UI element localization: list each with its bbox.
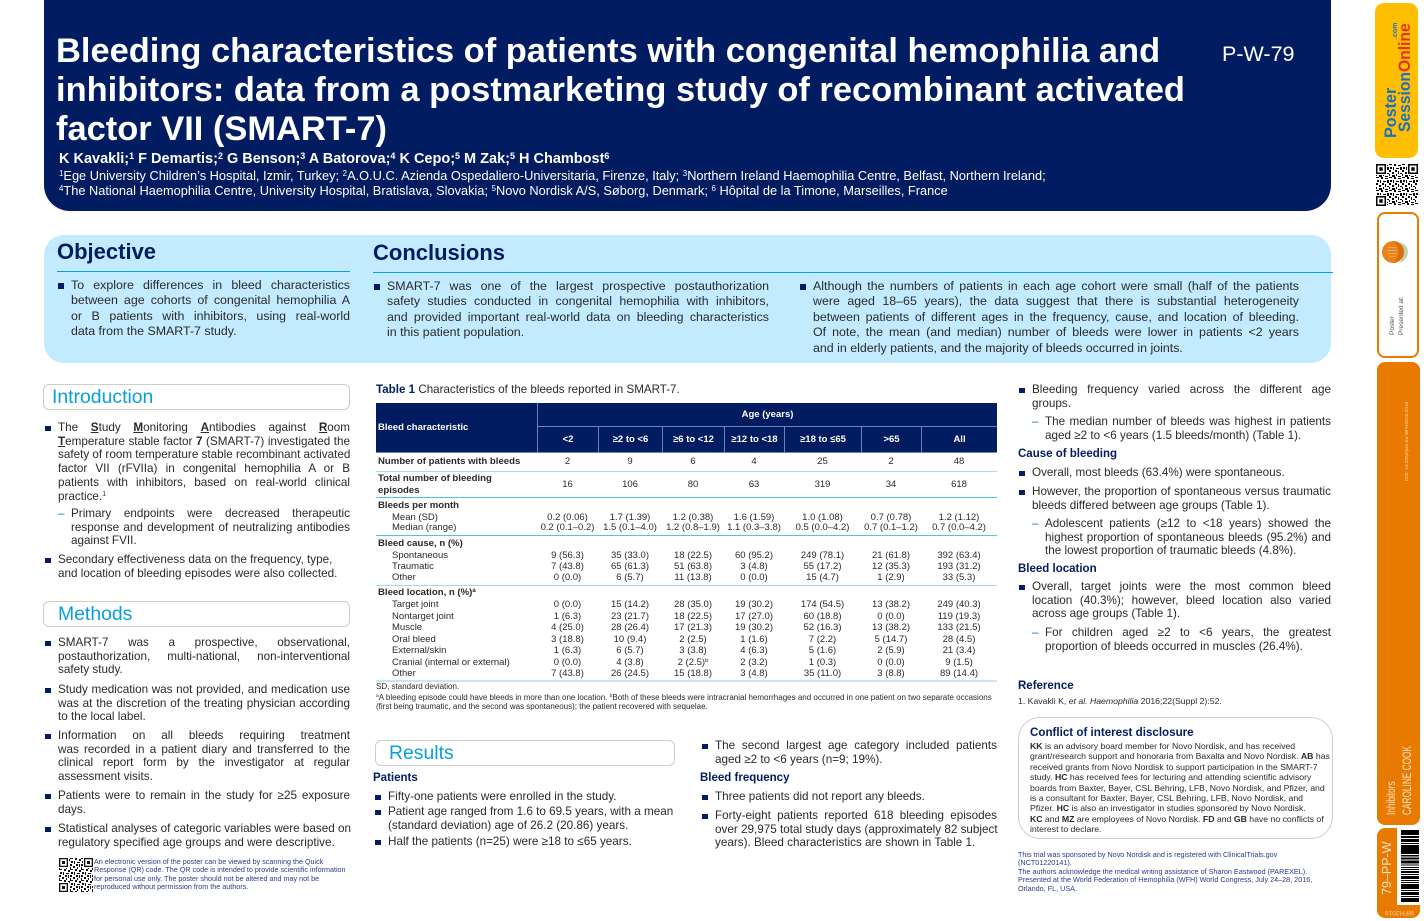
right column: median sub-bullet: aged ≥2 to <6 years (1.5 bleeds/month) (Table 1). — [1045, 429, 1301, 442]
table: bleed characteristics: 28 (4.5) — [943, 634, 975, 644]
table: bleed characteristics: 18 (22.5) — [674, 550, 712, 560]
table: bleed characteristics: Number of patients with bleeds — [378, 456, 520, 467]
table: bleed characteristics: 0.7 (0.78) — [871, 512, 911, 522]
table: bleed characteristics: Cranial (internal or external) — [392, 657, 510, 668]
conclusion text 2: were aged 18–65 years), the data suggest that there is substantial heterogeneity — [813, 294, 1299, 308]
QR code note: for personal use only. The poster should not be altered and may not be — [94, 874, 319, 883]
introduction sub-bullet — [71, 507, 350, 548]
table: bleed characteristics: 0.2 (0.1–0.2) — [541, 522, 594, 533]
table: bleed characteristics: 1.2 (0.38) — [673, 512, 713, 522]
affiliations: 1Ege University Children’s Hospital, Izmir, Turkey; 2A.O.U.C. Azienda Ospedaliero-Universitaria, Firenze, Italy; 3Northern Ireland Haemophilia Centre, Belfast, Northern Ireland; — [59, 168, 1046, 183]
sidebar: poster session online logo — [1375, 3, 1418, 158]
table: bleed characteristics: ≥6 to <12 — [673, 434, 714, 444]
table: bleed characteristics: 319 — [815, 478, 830, 490]
conclusion text 2: Of note, the mean (and median) number of bleeds were lower in patients <2 years — [813, 325, 1299, 339]
conflict text: Pfizer. HC is also an investigator in studies sponsored by Novo Nordisk. — [1030, 803, 1306, 813]
heading: methods — [43, 601, 350, 627]
heading: methods: Methods — [58, 603, 132, 625]
table: bleed characteristics: 2 (2.5) — [679, 634, 707, 644]
acknowledgements — [1018, 850, 1312, 892]
table: bleed characteristics: 1.2 (1.12) — [939, 512, 979, 522]
conclusion text 2: Although the numbers of patients in each age cohort were small (half of the patients — [813, 279, 1299, 293]
introduction bullet 1: The Study Monitoring Antibodies against Room — [58, 421, 350, 434]
results bullet: forty-eight patients — [715, 809, 997, 850]
methods bullet 4: days. — [58, 803, 86, 816]
results bullet: second largest category: aged ≥2 to <6 years (n=9; 19%). — [715, 753, 883, 766]
table: bleed characteristics: 3 (18.8) — [551, 634, 584, 644]
conclusion text 1: and provided important real-world data on bleeding characteristics — [387, 310, 769, 324]
table: bleed characteristics: ≥2 to <6 — [613, 434, 648, 444]
table: bleed characteristics: All — [953, 434, 966, 444]
location bullet: across age groups (Table 1). — [1032, 607, 1180, 620]
table: bleed characteristics: 2 — [565, 456, 570, 467]
table: bleed characteristics: Target joint — [392, 599, 438, 610]
acknowledgements: (NCT01220141). — [1018, 858, 1072, 867]
table: bleed characteristics: 15 (14.2) — [611, 599, 649, 610]
table: bleed characteristics: 174 (54.5) — [801, 599, 844, 610]
conclusion text 1 — [387, 279, 769, 341]
objective text — [71, 278, 350, 340]
table: bleed characteristics: Nontarget joint — [392, 610, 454, 622]
heading: introduction: Introduction — [52, 386, 153, 408]
title: inhibitors: data from a postmarketing study of recombinant activated — [56, 71, 1185, 109]
methods bullet 5: Statistical analyses of categoric variables were based on — [58, 822, 351, 835]
table: bleed characteristics: Muscle — [392, 622, 422, 633]
sidebar: poster code and barcode — [1377, 828, 1420, 918]
cause bullet 2: However, the proportion of spontaneous versus traumatic — [1032, 485, 1331, 498]
introduction bullet 2: Secondary effectiveness data on the frequency, type, — [58, 553, 332, 566]
subheading: cause of bleeding: Cause of bleeding — [1018, 448, 1117, 460]
table: bleed characteristics: 80 — [688, 478, 698, 490]
congress code: WFH2016 — [1385, 909, 1414, 916]
table: bleed characteristics: 133 (21.5) — [937, 622, 981, 633]
table footnotes: aA bleeding episode could have bleeds in more than one location. bBoth of these bleeds were intracranial hemorrhages and occurred in one patient on two separate occasions — [376, 692, 992, 702]
category text: Inhibitors — [1386, 781, 1398, 815]
table: bleed characteristics: 13 (38.2) — [872, 622, 910, 633]
QR code note: An electronic version of the poster can be viewed by scanning the Quick — [94, 856, 323, 866]
table: bleed characteristics: Oral bleed — [392, 634, 436, 644]
table: bleed characteristics: 0.5 (0.0–4.2) — [796, 522, 849, 533]
table: bleed characteristics: Bleeds per month — [378, 500, 459, 511]
cause sub-bullet: highest proportion of spontaneous bleeds (95.2%) and — [1045, 531, 1331, 544]
table: bleed characteristics: 3 (8.8) — [877, 668, 905, 679]
table: bleed characteristics: Spontaneous — [392, 550, 448, 560]
results bullet: age: Patient age ranged from 1.6 to 69.5 years, with a mean — [388, 805, 673, 818]
table footnotes: SD, standard deviation. — [376, 682, 459, 690]
conflict text: grant/research support and honoraria from Baxalta and Novo Nordisk. AB has — [1030, 751, 1330, 761]
heading: conclusions: Conclusions — [373, 240, 505, 265]
subheading: bleed location: Bleed location — [1018, 563, 1097, 575]
table: bleed characteristics: 1.6 (1.59) — [734, 512, 774, 522]
barcode background — [1397, 828, 1420, 905]
table: bleed characteristics: 34 — [886, 478, 896, 490]
table: bleed characteristics: 17 (21.3) — [674, 622, 712, 633]
table: bleed characteristics: 6 (5.7) — [616, 572, 644, 583]
table: bleed characteristics: 0 (0.0) — [554, 657, 581, 668]
methods bullet 4: Patients were to remain in the study for ≥25 exposure — [58, 789, 350, 802]
table: bleed characteristics: 249 (40.3) — [937, 599, 981, 610]
location bullet: Overall, target joints were the most common bleed — [1032, 580, 1331, 593]
methods bullet 1 — [58, 636, 350, 677]
results bullet: second largest category — [715, 739, 997, 766]
methods bullet 2 — [58, 683, 350, 724]
right column: bleeding frequency bullet — [1032, 383, 1331, 410]
table: bleed characteristics: 5 (14.7) — [875, 634, 907, 644]
methods bullet 3 — [58, 729, 350, 784]
table: bleed characteristics: 392 (63.4) — [937, 550, 981, 560]
table: bleed characteristics: 1 (6.3) — [554, 645, 581, 656]
table: bleed characteristics: Total number of bleeding — [378, 472, 492, 484]
methods bullet 2: Study medication was not provided, and medication use — [58, 683, 350, 696]
table: bleed characteristics: 0.7 (0.0–4.2) — [932, 522, 986, 533]
methods bullet 5: regulatory specified age groups and were descriptive. — [58, 836, 335, 849]
table: bleed characteristics: 10 (9.4) — [614, 634, 646, 644]
table: bleed characteristics: 618 — [951, 478, 967, 490]
table: bleed characteristics: Traumatic — [392, 561, 434, 572]
acknowledgements: This trial was sponsored by Novo Nordisk and is registered with ClinicalTrials.gov — [1018, 850, 1277, 858]
objective text: or B patients with inhibitors, using real-world — [71, 309, 350, 323]
table: bleed characteristics: 5 (1.6) — [809, 645, 836, 656]
results bullet: forty-eight patients: years). Bleed characteristics are shown in Table 1. — [715, 836, 975, 849]
introduction bullet 1: safety of room temperature stable recombinant activated — [58, 448, 350, 461]
location sub-bullet: proportion of bleeds occurred in muscles (26.4%). — [1045, 640, 1303, 653]
right column: median sub-bullet: The median number of bleeds was highest in patients — [1045, 415, 1331, 428]
introduction bullet 2 — [58, 553, 350, 580]
introduction sub-bullet: against FVII. — [71, 534, 137, 547]
title: Bleeding characteristics of patients with congenital hemophilia and — [56, 32, 1160, 70]
table: bleed characteristics: 33 (5.3) — [943, 572, 975, 583]
header banner — [44, 0, 1331, 211]
table: bleed characteristics: 15 (4.7) — [806, 572, 839, 583]
subheading: patients: Patients — [373, 772, 418, 784]
sidebar: presented at card — [1377, 212, 1419, 358]
table: bleed characteristics: 4 (25.0) — [551, 622, 584, 633]
table: bleed characteristics: 0 (0.0) — [877, 657, 905, 668]
table: bleed characteristics: 17 (27.0) — [735, 610, 773, 622]
heading: objective: Objective — [57, 239, 156, 264]
QR code note: Response (QR) code. The QR code is intended to provide scientific information — [94, 865, 346, 874]
table: bleed characteristics: Mean (SD) — [392, 512, 438, 522]
methods bullet 1: safety study. — [58, 663, 123, 676]
right column: median sub-bullet — [1045, 415, 1331, 442]
table: bleed characteristics: Bleed cause, n (%) — [378, 538, 463, 549]
table: bleed characteristics: 9 (1.5) — [945, 657, 973, 668]
conflict text — [1030, 741, 1330, 834]
table: bleed characteristics: 0.2 (0.06) — [547, 512, 588, 522]
icon: QR code — [59, 858, 93, 892]
methods bullet 5 — [58, 822, 350, 849]
table: bleed characteristics: 23 (21.7) — [611, 610, 649, 622]
results bullet: forty-eight patients: Forty-eight patients reported 618 bleeding episodes — [715, 809, 997, 822]
table: bleed characteristics: 25 — [817, 456, 828, 467]
conflict text: interest to declare. — [1030, 824, 1101, 834]
introduction bullet 1: practice.1 — [58, 489, 106, 503]
table: bleed characteristics: 2 (2.5)b — [678, 657, 708, 668]
panel: conflict of interest — [1018, 717, 1333, 839]
cause bullet 2 — [1032, 485, 1331, 512]
methods bullet 4 — [58, 789, 350, 816]
acknowledgements: Orlando, FL, USA. — [1018, 884, 1077, 892]
subheading: reference: Reference — [1018, 680, 1074, 692]
table: bleed characteristics: 3 (3.8) — [679, 645, 707, 656]
table: bleed characteristics: 21 (61.8) — [872, 550, 910, 560]
conclusion text 1: safety studies conducted in congenital hemophilia with inhibitors, — [387, 294, 769, 308]
introduction bullet 1: factor VII (rFVIIa) in congenital hemophilia A or B — [58, 462, 350, 475]
table: bleed characteristics: ≥12 to <18 — [731, 434, 778, 444]
results bullet: three patients: Three patients did not report any bleeds. — [715, 790, 925, 803]
conclusion text 1: SMART-7 was one of the largest prospective postauthorization — [387, 279, 769, 293]
table: bleed characteristics: 26 (24.5) — [611, 668, 649, 679]
table: bleed characteristics: 0.7 (0.1–1.2) — [864, 522, 918, 533]
table: bleed characteristics: 1 (2.9) — [877, 572, 905, 583]
table: bleed characteristics: 0 (0.0) — [740, 572, 768, 583]
objective text: To explore differences in bleed characteristics — [71, 278, 350, 292]
table: bleed characteristics: 1.1 (0.3–3.8) — [727, 522, 781, 533]
icon: sidebar QR code — [1376, 164, 1418, 206]
table: bleed characteristics: 16 — [562, 478, 573, 490]
table: bleed characteristics: Age (years) — [742, 408, 793, 420]
poster number: P-W-79 — [1222, 42, 1294, 66]
presented at text: Poster — [1389, 316, 1396, 335]
table: bleed characteristics: 2 — [888, 456, 894, 467]
cause sub-bullet: Adolescent patients (≥12 to <18 years) showed the — [1045, 517, 1331, 530]
subheading: bleed frequency: Bleed frequency — [700, 772, 789, 784]
table: bleed characteristics: 19 (30.2) — [735, 622, 773, 633]
table: bleed characteristics: Other — [392, 668, 416, 679]
introduction sub-bullet: Primary endpoints were decreased therapeutic — [71, 507, 350, 520]
acknowledgements: The authors acknowledge the medical writing assistance of Sharon Eastwood (PAREXEL). — [1018, 866, 1307, 876]
table: bleed characteristics: 28 (35.0) — [674, 599, 712, 610]
location sub-bullet — [1045, 626, 1331, 653]
table: bleed characteristics: 35 (33.0) — [611, 550, 649, 560]
right column: bleeding frequency bullet: groups. — [1032, 397, 1071, 410]
table: bleed characteristics: 13 (38.2) — [872, 599, 910, 610]
heading: results: Results — [389, 742, 454, 764]
table: bleed characteristics: ≥18 to ≤65 — [800, 434, 846, 444]
table: bleed characteristics: >65 — [883, 434, 900, 444]
authors: K Kavakli;1 F Demartis;2 G Benson;3 A Batorova;4 K Cepo;5 M Zak;5 H Chambost6 — [59, 151, 609, 167]
results bullet: forty-eight patients: over 29,975 total study days (approximately 82 subject — [715, 823, 998, 836]
logo domain: .com — [1392, 23, 1399, 39]
reference text: 1. Kavakli K, et al. Haemophilia 2016;22(Suppl 2):52. — [1018, 696, 1222, 706]
logo text: Poster — [1381, 88, 1400, 138]
table: bleed characteristics: 12 (35.3) — [872, 561, 910, 572]
table: bleed characteristics: 11 (13.8) — [674, 572, 712, 583]
location bullet — [1032, 580, 1331, 621]
table: bleed characteristics: 28 (26.4) — [611, 622, 649, 633]
QR code note — [94, 856, 346, 891]
table: bleed characteristics: 52 (16.3) — [803, 622, 842, 633]
conclusion text 1: in this patient population. — [387, 325, 524, 339]
table: bleed characteristics: 7 (43.8) — [551, 561, 584, 572]
table: bleed characteristics: 1.5 (0.1–4.0) — [603, 522, 657, 533]
results bullet: age — [388, 805, 678, 832]
cause sub-bullet: the lowest proportion of traumatic bleeds (4.8%). — [1045, 544, 1296, 557]
table: bleed characteristics: Bleed location, n (%)a — [378, 586, 476, 598]
DOI text: DOI: 10.3252/pso.eu.WFH2016.2016 — [1405, 402, 1410, 481]
location bullet: location (40.3%); however, bleed location also varied — [1032, 594, 1331, 607]
conflict text: study. HC has received fees for lecturing and attending scientific advisory — [1030, 772, 1311, 782]
conclusion text 2: between patients of different ages in the frequency, cause, and location of bleeding. — [813, 310, 1299, 324]
table footnotes: (first being traumatic, and the second was spontaneous); the patient recovered with sequelae. — [376, 702, 708, 711]
table: bleed characteristics: 21 (3.4) — [943, 645, 975, 656]
table: bleed characteristics: 48 — [954, 456, 964, 467]
QR code note: reproduced without permission from the authors. — [94, 882, 248, 891]
table: bleed characteristics: 9 — [627, 456, 633, 467]
icon: congress logo — [1382, 241, 1408, 263]
table: bleed characteristics: 18 (22.5) — [674, 610, 712, 622]
table: bleed characteristics: 0 (0.0) — [554, 572, 581, 583]
introduction bullet 1: patients with inhibitors, based on real-world clinical — [58, 476, 350, 489]
table: bleed characteristics: 4 (6.3) — [740, 645, 768, 656]
results bullet: second largest category: The second largest age category included patients — [715, 739, 997, 752]
conflict text: boards from Baxter, Bayer, CSL Behring, LFB, Novo Nordisk, and Pfizer, and — [1030, 783, 1325, 793]
table: bleed characteristics: 55 (17.2) — [803, 561, 842, 572]
table footnotes — [376, 682, 992, 711]
conflict text: KC and MZ are employees of Novo Nordisk. FD and GB have no conflicts of — [1030, 814, 1324, 824]
table: bleed characteristics: 0 (0.0) — [554, 599, 581, 610]
table: bleed characteristics — [376, 403, 997, 682]
table: bleed characteristics: 65 (61.3) — [611, 561, 649, 572]
introduction sub-bullet: response and development of neutralizing antibodies — [71, 521, 350, 534]
panel: objective and conclusions — [44, 235, 1331, 363]
conflict text: is a consultant for Baxter, Bayer, CSL Behring, LFB, Novo Nordisk, and — [1030, 793, 1303, 803]
table: bleed characteristics: 6 (5.7) — [616, 645, 644, 656]
conclusions rule — [373, 272, 1333, 273]
table: bleed characteristics: 106 — [622, 478, 638, 490]
table: bleed characteristics: 63 — [749, 478, 759, 490]
conflict text: KK is an advisory board member for Novo Nordisk, and has received — [1030, 741, 1295, 751]
table: bleed characteristics: episodes — [378, 484, 420, 496]
table: bleed characteristics: <2 — [563, 434, 573, 444]
table: bleed characteristics: 4 (3.8) — [616, 657, 644, 668]
results bullet: age: (standard deviation) age of 26.2 (20.86) years. — [388, 819, 628, 832]
table: bleed characteristics: 15 (18.8) — [674, 668, 712, 679]
table: bleed characteristics: 51 (63.8) — [674, 561, 712, 572]
table: bleed characteristics: 35 (11.0) — [804, 668, 841, 679]
introduction bullet 1 — [58, 421, 350, 503]
cause sub-bullet — [1045, 517, 1331, 558]
cause bullet 2: bleeds differed between age groups (Table 1). — [1032, 499, 1270, 512]
objective text: between age cohorts of congenital hemophilia A — [71, 293, 350, 307]
table: bleed characteristics: 1.7 (1.39) — [610, 512, 650, 522]
table: bleed characteristics: 1.0 (1.08) — [802, 512, 843, 522]
barcode — [1401, 830, 1419, 902]
results bullet: enrolled: Fifty-one patients were enrolled in the study. — [388, 790, 616, 803]
introduction bullet 2: and location of bleeding episodes were also collected. — [58, 567, 337, 580]
table: bleed characteristics: 89 (14.4) — [940, 668, 978, 679]
results bullet: half: Half the patients (n=25) were ≥18 to ≤65 years. — [388, 835, 632, 848]
table: bleed characteristics: Bleed characteristic — [378, 422, 468, 432]
cause bullet 1: Overall, most bleeds (63.4%) were spontaneous. — [1032, 466, 1285, 479]
conflict text: received grants from Novo Nordisk to support participation in the SMART-7 — [1030, 762, 1318, 772]
table: bleed characteristics: 2 (5.9) — [877, 645, 905, 656]
methods bullet 3: Information on all bleeds requiring treatment — [58, 729, 350, 742]
table: bleed characteristics: 3 (4.8) — [740, 668, 768, 679]
presenter name: CAROLINE COOK — [1402, 746, 1414, 815]
methods bullet 1: SMART-7 was a prospective, observational, — [58, 636, 350, 649]
table: bleed characteristics: 7 (2.2) — [809, 634, 836, 644]
table: bleed characteristics: 249 (78.1) — [801, 550, 844, 560]
methods bullet 1: postauthorization, multi-national, non-interventional — [58, 650, 350, 663]
table: bleed characteristics: 1 (0.3) — [809, 657, 836, 668]
conflict heading: Conflict of interest disclosure — [1030, 726, 1194, 738]
table: bleed characteristics: 60 (95.2) — [735, 550, 773, 560]
table: bleed characteristics: 6 — [690, 456, 696, 467]
table: bleed characteristics: Other — [392, 572, 416, 583]
table: bleed characteristics: 60 (18.8) — [803, 610, 842, 622]
table: bleed characteristics: 0 (0.0) — [877, 610, 905, 622]
heading: results — [375, 740, 675, 766]
table: bleed characteristics: 3 (4.8) — [740, 561, 768, 572]
poster code: 79–PP-W — [1380, 842, 1394, 895]
title — [56, 32, 1185, 148]
methods bullet 3: was recorded in a patient diary and transferred to the — [58, 743, 350, 756]
table: bleed characteristics: 1 (1.6) — [740, 634, 768, 644]
table: bleed characteristics: 119 (19.3) — [938, 610, 980, 622]
table caption: Table 1 Characteristics of the bleeds reported in SMART-7. — [376, 383, 680, 396]
objective rule — [57, 271, 350, 272]
heading: introduction — [43, 384, 350, 410]
title: factor VII (SMART-7) — [56, 110, 387, 148]
table: bleed characteristics: 7 (43.8) — [551, 668, 584, 679]
table: bleed characteristics: 2 (3.2) — [740, 657, 768, 668]
table: bleed characteristics: External/skin — [392, 645, 446, 656]
introduction bullet 1: Temperature stable factor 7 (SMART-7) investigated the — [58, 435, 350, 448]
table: bleed characteristics: 1 (6.3) — [554, 610, 581, 622]
table: bleed characteristics: 19 (30.2) — [735, 599, 773, 610]
affiliations: 4The National Haemophilia Centre, University Hospital, Bratislava, Slovakia; 5Novo Nordisk A/S, Søborg, Denmark; 6 Hôpital de la Timone, Marseilles, France — [59, 183, 948, 198]
objective text: data from the SMART-7 study. — [71, 324, 237, 338]
sidebar: orange category panel — [1377, 362, 1420, 825]
methods bullet 2: was at the discretion of the treating physician according — [58, 697, 350, 710]
affiliations — [59, 168, 1046, 198]
table: bleed characteristics: 193 (31.2) — [937, 561, 981, 572]
table: bleed characteristics: Median (range) — [392, 522, 456, 533]
acknowledgements: Presented at the World Federation of Hemophilia (WFH) World Congress, July 24–28, 2016, — [1018, 875, 1312, 884]
table: bleed characteristics: 9 (56.3) — [551, 550, 584, 560]
methods bullet 3: assessment visits. — [58, 770, 153, 783]
location sub-bullet: For children aged ≥2 to <6 years, the greatest — [1045, 626, 1331, 639]
conclusion text 2 — [813, 279, 1299, 356]
table: bleed characteristics: 4 — [751, 456, 757, 467]
methods bullet 2: to the local label. — [58, 710, 146, 723]
presented at label: Presented at: — [1398, 296, 1405, 335]
methods bullet 3: clinical report form by the investigator at regular — [58, 756, 350, 769]
logo text second line: SessionOnline — [1395, 23, 1414, 132]
right column: bleeding frequency bullet: Bleeding frequency varied across the different age — [1032, 383, 1331, 396]
conclusion text 2: and in elderly patients, and the majority of bleeds occurred in joints. — [813, 341, 1183, 355]
table: bleed characteristics: 1.2 (0.8–1.9) — [666, 522, 720, 533]
